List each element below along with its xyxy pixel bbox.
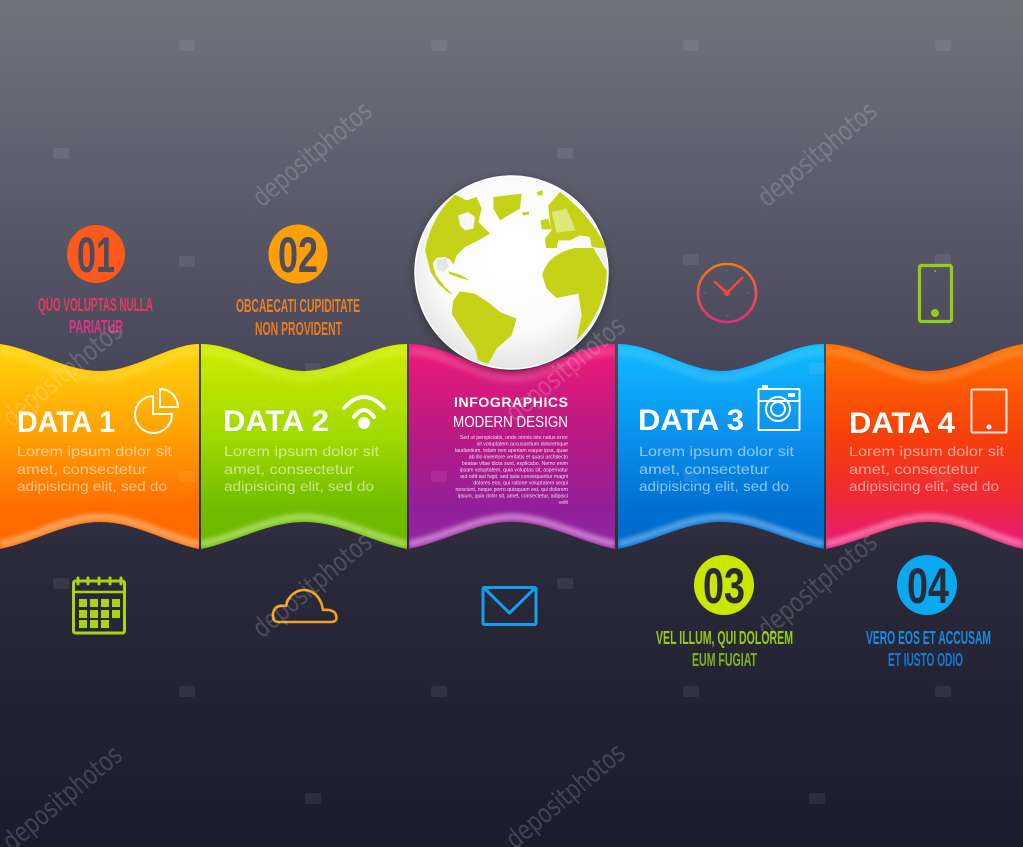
text block: data 3: adipisicing elit, sed do [639, 478, 789, 494]
number badge 01 with caption [38, 225, 153, 337]
watermarks: depositphotos [500, 311, 631, 428]
text block: data 4: adipisicing elit, sed do [849, 478, 999, 494]
icon: pie chart [135, 389, 178, 433]
Africa [542, 248, 607, 340]
text block: paragraph: sit voluptatem accusantium doloremque [477, 442, 568, 448]
watermarks: depositphotos [752, 96, 883, 213]
icon: smartphone [920, 266, 952, 322]
text block: data 2: amet, consectetur [224, 461, 354, 477]
icon: cloud [273, 590, 336, 622]
text block: paragraph: beatae vitae dicta sunt, explicabo. Nemo enim [462, 461, 568, 467]
number badge 02 with caption: 02 [278, 227, 318, 283]
heading: data 3: DATA 3 [638, 404, 744, 437]
number badge 02 with caption: NON PROVIDENT [255, 319, 342, 339]
text block: data 1: Lorem ipsum dolor sit [17, 443, 172, 459]
icon: tablet [972, 390, 1006, 432]
text block: paragraph: ab illo inventore veritatis et quasi architecto [469, 454, 568, 460]
text block: paragraph: laudantium, totam rem aperiam eaque ipsa, quae [455, 448, 568, 454]
watermarks: depositphotos [752, 527, 883, 644]
watermarks: depositphotos [247, 96, 378, 213]
text block: paragraph [455, 435, 569, 506]
number badge 03 with caption: 03 [703, 558, 745, 614]
number badge 01 with caption: QUO VOLUPTAS NULLA [38, 295, 153, 315]
number badge 02 with caption [236, 224, 360, 339]
text block: data 3: amet, consectetur [639, 461, 769, 477]
icon: calendar [73, 578, 125, 633]
number badge 01 with caption: PARIATUR [69, 317, 123, 337]
number badge 04 with caption [866, 555, 991, 670]
text block: data 2 [224, 443, 379, 494]
text block: data 1: amet, consectetur [17, 461, 147, 477]
heading: infographics: INFOGRAPHICS [454, 394, 568, 410]
South America [452, 291, 517, 364]
text block: data 4: Lorem ipsum dolor sit [849, 443, 1004, 459]
text block: data 1: adipisicing elit, sed do [17, 478, 167, 494]
number badge 01 with caption: 01 [77, 227, 115, 283]
heading: data 4: DATA 4 [849, 407, 955, 440]
icon: envelope [483, 588, 536, 624]
text block: paragraph: Sed ut perspiciatis, unde omnis iste natus error [460, 435, 568, 441]
panel: infographics [409, 344, 615, 549]
text block: paragraph: nesciunt, neque porro quisquam est, qui dolorem [456, 487, 568, 493]
text block: paragraph: dolores eos, qui ratione voluptatem sequi [473, 480, 568, 486]
icon: camera [758, 385, 800, 430]
text block: data 1 [17, 443, 172, 494]
panel: data 4 [826, 344, 1023, 549]
panel: data 3 [618, 344, 824, 549]
heading: data 2: DATA 2 [223, 405, 329, 438]
subheading: modern design: MODERN DESIGN [453, 414, 568, 431]
number badge 03 with caption [656, 555, 793, 670]
watermarks: depositphotos [0, 316, 128, 433]
panel: data 1 [0, 344, 199, 549]
number badge 04 with caption: ET IUSTO ODIO [888, 650, 963, 670]
text block: data 3: Lorem ipsum dolor sit [639, 443, 794, 459]
text block: data 4: amet, consectetur [849, 461, 979, 477]
text block: data 2: adipisicing elit, sed do [224, 478, 374, 494]
text block: data 3 [639, 443, 794, 494]
Europe [545, 192, 607, 249]
text block: paragraph: velit [559, 500, 569, 506]
number badge 03 with caption: VEL ILLUM, QUI DOLOREM [656, 628, 793, 648]
Greenland [493, 194, 522, 220]
text block: paragraph: ipsam voluptatem, quia voluptas sit, aspernatur [460, 468, 568, 474]
number badge 04 with caption: 04 [907, 558, 949, 614]
icon: wifi [344, 397, 384, 429]
number badge 02 with caption: OBCAECATI CUPIDITATE [236, 296, 360, 316]
heading: data 1: DATA 1 [17, 406, 115, 439]
North America [425, 195, 490, 295]
number badge 03 with caption: EUM FUGIAT [692, 650, 757, 670]
wave band panels [0, 344, 1023, 549]
icon: clock [698, 264, 756, 322]
text block: paragraph: aut odit aut fugit, sed quia consequuntur magni [460, 474, 568, 480]
text block: paragraph: ipsum, quia dolor sit, amet, consectetur, adipisci [458, 494, 568, 500]
text block: data 2: Lorem ipsum dolor sit [224, 443, 379, 459]
globe [414, 176, 608, 372]
text block: data 4 [849, 443, 1004, 494]
panel: data 2 [201, 344, 407, 549]
watermarks: depositphotos [247, 527, 378, 644]
